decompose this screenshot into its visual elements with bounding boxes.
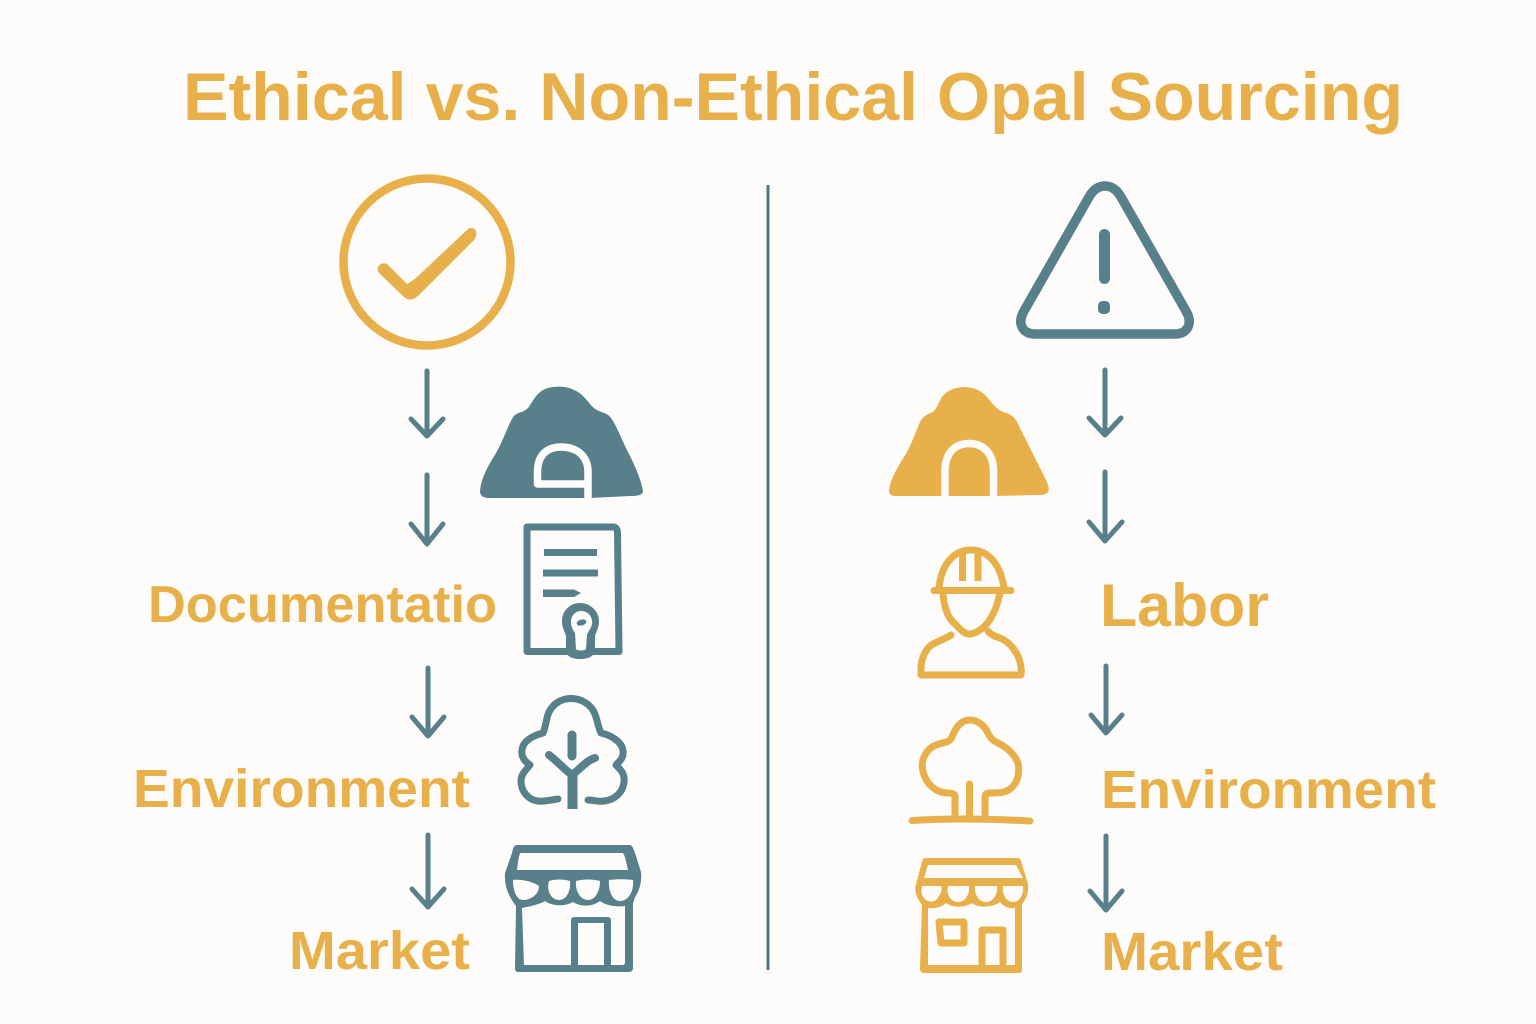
icon: non-ethical market xyxy=(915,858,1028,973)
icon: ethical market xyxy=(505,845,641,972)
icon: worker xyxy=(921,550,1021,675)
label: Market left: Market xyxy=(289,921,470,981)
icon: non-ethical tree xyxy=(912,720,1030,821)
label: Labor: Labor xyxy=(1100,572,1269,639)
arrow: left 2 xyxy=(411,475,443,544)
icon: non-ethical mine xyxy=(889,387,1049,498)
arrow: right 2 xyxy=(1089,472,1122,541)
title: Ethical vs. Non-Ethical Opal Sourcing xyxy=(183,59,1403,135)
arrow: left 1 xyxy=(411,371,443,436)
icon: documentation certificate xyxy=(527,527,619,659)
center divider xyxy=(766,185,770,970)
arrow: right 3 xyxy=(1091,666,1122,733)
icon: ethical tree xyxy=(521,698,624,809)
label: Environment left: Environment xyxy=(133,759,470,819)
arrow: right 1 xyxy=(1089,370,1121,435)
icon: ethical mine xyxy=(480,387,643,498)
label: Market right: Market xyxy=(1101,922,1283,982)
icon: warning triangle xyxy=(1021,186,1189,334)
label: Documentation: Documentatio xyxy=(148,576,497,634)
arrow: left 3 xyxy=(412,668,444,736)
icon: check circle xyxy=(344,178,510,346)
arrow: right 4 xyxy=(1090,836,1122,910)
arrow: left 4 xyxy=(412,835,444,907)
label: Environment right: Environment xyxy=(1101,760,1436,820)
